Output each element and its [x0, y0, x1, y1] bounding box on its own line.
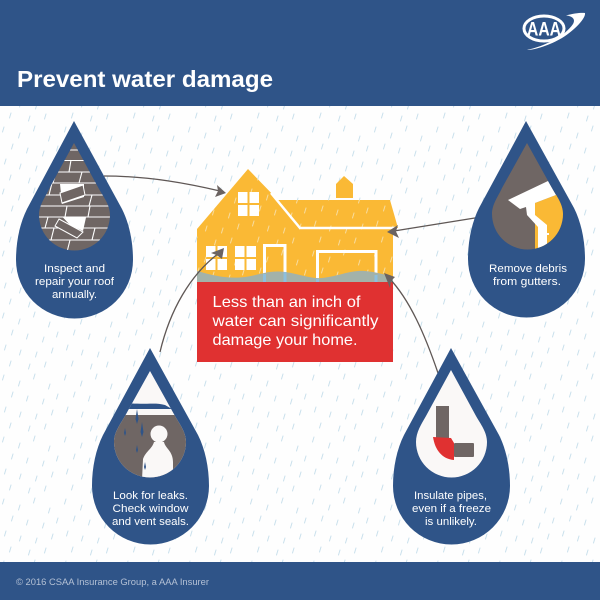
garage door: [318, 252, 376, 282]
caption: from gutters.: [493, 276, 561, 288]
caption: is unlikely.: [425, 516, 477, 528]
caption: Inspect and: [44, 263, 105, 275]
icon: roof bricks: [39, 143, 110, 250]
house body: [197, 169, 398, 282]
lower left window: [206, 246, 227, 270]
caption: Check window: [112, 503, 189, 515]
red callout: Less than an inch of: [212, 294, 361, 311]
arrow: pipes to house: [384, 273, 438, 373]
chimney: [336, 176, 353, 198]
caption: even if a freeze: [412, 503, 491, 515]
caption: [489, 263, 568, 288]
red callout: water can significantly: [211, 313, 378, 330]
roof line: [271, 193, 397, 228]
header band: [0, 0, 600, 106]
drop: leaks: [92, 348, 209, 544]
footer band: [0, 562, 600, 600]
arrow: leaks to house: [160, 248, 224, 352]
caption: repair your roof: [35, 276, 115, 288]
caption: Remove debris: [489, 263, 568, 275]
caption: [112, 490, 189, 528]
upper window: [238, 192, 259, 216]
title: Prevent water damage: [17, 66, 273, 92]
drop: inspect roof: [16, 121, 133, 318]
red callout: [197, 282, 393, 362]
red callout: damage your home.: [212, 332, 358, 349]
lower middle window: [235, 246, 256, 270]
door: [264, 246, 285, 282]
caption: and vent seals.: [112, 516, 189, 528]
caption: annually.: [52, 289, 97, 301]
arrow: gutters to house: [387, 217, 481, 238]
AAA logo: [524, 13, 585, 50]
flood water: [197, 271, 393, 282]
caption: Look for leaks.: [113, 490, 188, 502]
caption: [35, 263, 115, 301]
house illustration: [197, 169, 398, 282]
arrow: roof to house: [104, 176, 226, 197]
caption: [412, 490, 491, 528]
icon: insulated pipe: [416, 370, 487, 477]
icon: leaking ceiling and person: [114, 371, 186, 478]
icon: gutter: [492, 143, 563, 250]
drop: gutters: [468, 121, 585, 318]
drop: pipes: [393, 348, 510, 544]
AAA logo: AAA: [527, 20, 561, 40]
copyright: © 2016 CSAA Insurance Group, a AAA Insurer: [16, 577, 209, 588]
caption: Insulate pipes,: [414, 490, 487, 502]
